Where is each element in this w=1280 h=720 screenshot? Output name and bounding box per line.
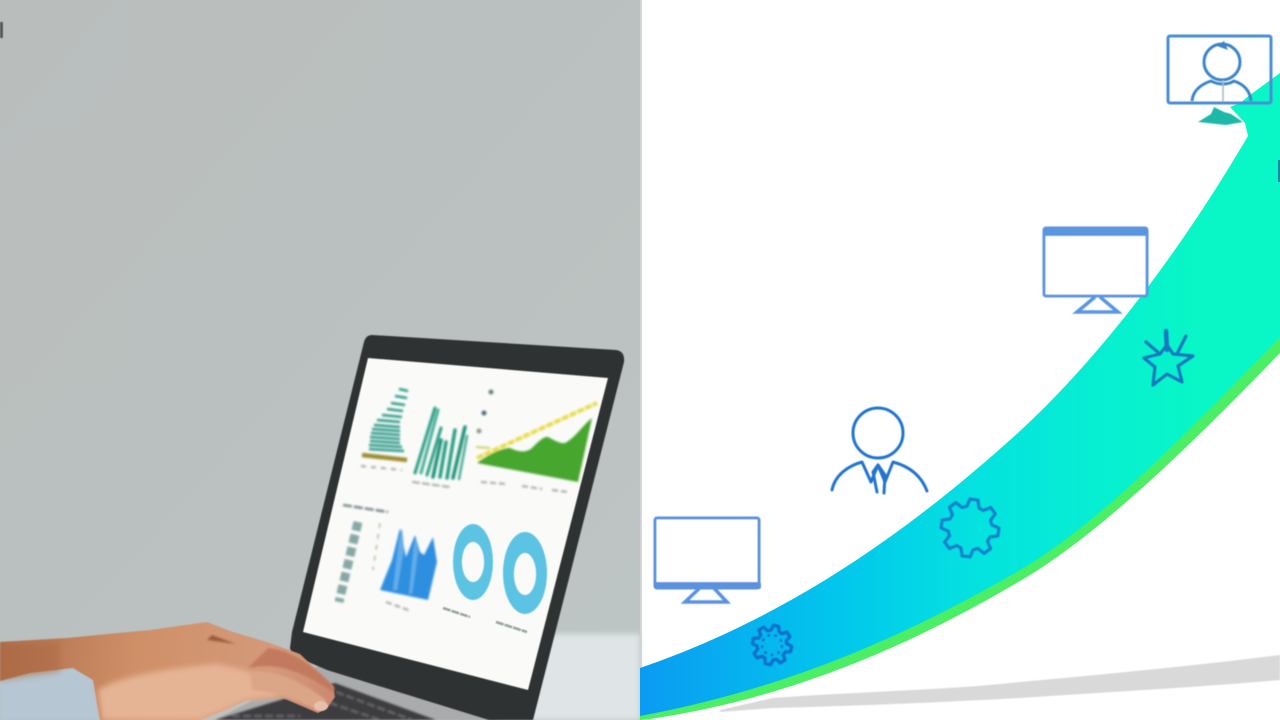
laptop — [215, 335, 624, 720]
chart: teal vertical bars — [413, 408, 467, 487]
icon: gear large — [938, 496, 1002, 560]
growth arrow — [640, 73, 1280, 720]
icon: person in suit — [832, 408, 927, 493]
icon fragment at right edge — [1278, 160, 1280, 182]
icon: monitor — [1044, 227, 1147, 312]
icon: star — [1144, 331, 1193, 385]
icon: gear small — [749, 622, 795, 668]
laptop screen — [303, 358, 608, 690]
keyboard base — [215, 664, 500, 720]
keys — [215, 683, 436, 720]
chart: first donut — [443, 524, 493, 617]
corner mark — [0, 22, 3, 38]
green edge of arrow — [640, 335, 1280, 720]
chart: legend list — [339, 505, 388, 602]
icon: monitor small left — [654, 518, 761, 602]
sleeve — [0, 668, 100, 720]
chart: blue area spikes — [380, 528, 437, 611]
arrow body — [640, 73, 1280, 716]
shadow of arrow — [720, 655, 1280, 712]
panel: white growth panel — [640, 36, 1280, 720]
axis ticks — [361, 466, 402, 470]
desk surface — [500, 634, 640, 720]
panel divider — [640, 0, 642, 720]
chart: green area with yellow trend line — [476, 390, 597, 492]
chart: teal stacked bars — [361, 389, 408, 470]
chart: second donut — [496, 532, 547, 632]
icon: monitor with person — [1168, 36, 1271, 125]
hand on keyboard — [0, 622, 335, 720]
panel: photo of person using laptop — [0, 0, 640, 720]
laptop lid — [290, 335, 624, 720]
